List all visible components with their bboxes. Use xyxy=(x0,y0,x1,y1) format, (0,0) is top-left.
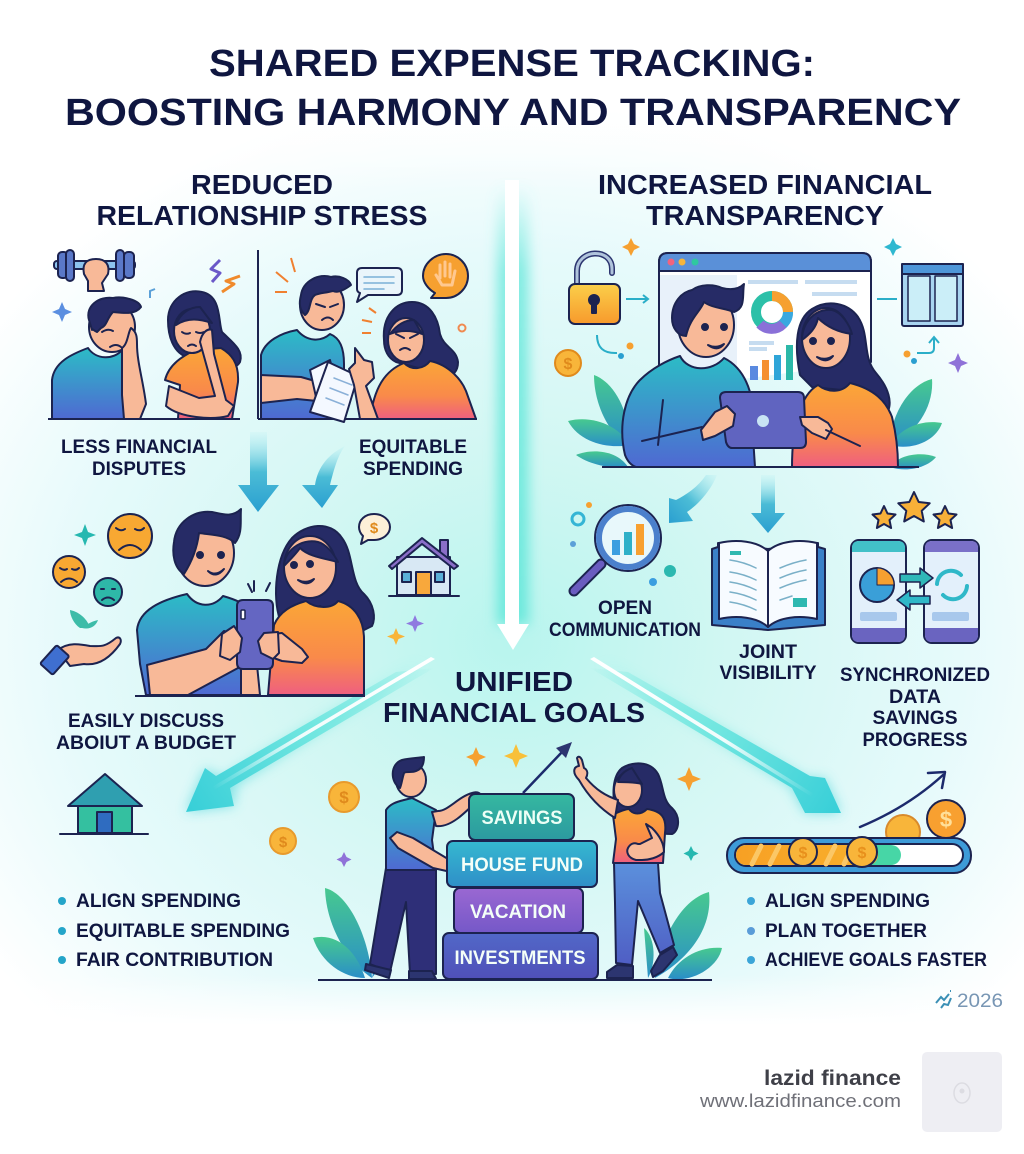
icon: coin xyxy=(555,350,581,376)
label: synchronized data savings progress: DATA xyxy=(889,687,941,708)
icon: stop hand bubble xyxy=(423,254,468,298)
icon: progress bar with coins: $ xyxy=(858,845,867,862)
icon: coin bubble xyxy=(359,514,390,544)
person: woman with phone xyxy=(260,526,374,695)
title: SHARED EXPENSE TRACKING: xyxy=(209,43,815,85)
arrow: to joint visibility xyxy=(751,475,785,533)
icon: sad face large xyxy=(108,514,152,558)
footer brand: www.lazidfinance.com xyxy=(699,1091,901,1111)
title xyxy=(65,43,961,134)
icon: progress bar with coins: $ xyxy=(799,845,808,862)
icon: music note xyxy=(150,289,155,298)
person: woman with tablet xyxy=(792,303,898,467)
stacked blocks xyxy=(443,794,598,979)
icon: coin bubble: $ xyxy=(370,520,379,537)
icon: green house xyxy=(60,774,148,834)
title: BOOSTING HARMONY AND TRANSPARENCY xyxy=(65,92,961,134)
label: equitable spending xyxy=(359,437,467,480)
label: joint visibility: JOINT xyxy=(739,642,797,663)
icon: speech bubble xyxy=(357,268,402,302)
text lines in dashboard xyxy=(748,282,857,349)
list: left bullets: FAIR CONTRIBUTION xyxy=(76,950,273,971)
panel: increased financial transparency xyxy=(549,169,990,751)
label: equitable spending: SPENDING xyxy=(363,459,463,480)
arrow to left section xyxy=(186,657,435,812)
label: open communication: OPEN xyxy=(598,598,652,619)
icon: padlock xyxy=(569,253,620,324)
icon: leaves xyxy=(313,888,722,979)
person: man stacking xyxy=(365,757,481,979)
dashboard window xyxy=(659,253,871,390)
heading: increased financial transparency: INCREASED FINANCIAL xyxy=(598,169,932,200)
heading: unified financial goals: UNIFIED xyxy=(455,666,573,697)
icon: phone xyxy=(220,581,279,669)
icon: coins: $ xyxy=(339,788,349,807)
footer brand: lazid finance xyxy=(764,1066,901,1090)
icon: progress bar with coins: $ xyxy=(940,807,952,832)
block: savings xyxy=(469,794,574,840)
icon: stars xyxy=(872,492,956,528)
block: house fund: HOUSE FUND xyxy=(461,855,583,876)
icon: tablet xyxy=(701,392,860,448)
person: man with tablet xyxy=(622,284,755,467)
divider lines xyxy=(48,250,477,419)
arrow: to open communication xyxy=(669,475,717,523)
heading: reduced relationship stress: RELATIONSHIP STRESS xyxy=(96,200,428,231)
arrow to right section xyxy=(590,657,841,813)
label: open communication: COMMUNICATION xyxy=(549,620,701,641)
person: stressed woman xyxy=(165,291,241,419)
arrow: curved down xyxy=(302,446,345,508)
heading: reduced relationship stress: REDUCED xyxy=(191,169,333,200)
heading: reduced relationship stress xyxy=(96,169,428,231)
icon: synced phones xyxy=(851,540,979,643)
icon: coins xyxy=(270,782,359,854)
panel: reduced relationship stress xyxy=(40,169,477,971)
label: synchronized data savings progress xyxy=(840,665,990,751)
icon: open book xyxy=(712,541,825,630)
icon: connectors xyxy=(597,295,939,353)
icon: sad face teal xyxy=(94,578,122,606)
footer logo square xyxy=(922,1052,1002,1132)
chart: donut xyxy=(756,296,788,329)
icon: house xyxy=(389,538,459,596)
label: less financial disputes: LESS FINANCIAL xyxy=(61,437,217,458)
block: savings: SAVINGS xyxy=(482,808,562,829)
icon: small ring xyxy=(458,324,466,332)
icon: anger marks xyxy=(275,258,376,333)
icon: sparkle teal xyxy=(74,524,96,546)
year mark xyxy=(936,991,1003,1012)
panel: unified financial goals xyxy=(270,666,987,980)
list: left bullets: EQUITABLE SPENDING xyxy=(76,921,290,942)
icon: sparkles xyxy=(622,238,968,373)
label: joint visibility xyxy=(720,642,817,684)
person: angry man xyxy=(261,276,351,419)
label: synchronized data savings progress: SAVINGS xyxy=(872,708,958,729)
list: right bullets: PLAN TOGETHER xyxy=(765,921,927,942)
icon: papers xyxy=(310,360,358,422)
icon: bubbles xyxy=(570,502,676,586)
icon: window xyxy=(902,264,963,326)
label: synchronized data savings progress: SYNCHRONIZED xyxy=(840,665,990,686)
block: vacation xyxy=(454,888,583,933)
year mark: 2026 xyxy=(957,991,1003,1012)
icon: dumbbell xyxy=(54,250,135,291)
list: right bullets: ALIGN SPENDING xyxy=(765,891,930,912)
icon: sparkles xyxy=(387,615,424,645)
person: man with phone xyxy=(137,509,260,695)
label: less financial disputes xyxy=(61,437,217,480)
icon: leaves xyxy=(568,375,942,469)
central arrow xyxy=(497,180,529,650)
label: equitable spending: EQUITABLE xyxy=(359,437,467,458)
arrow: down left xyxy=(238,432,279,512)
block: investments: INVESTMENTS xyxy=(454,948,586,969)
arrow: growth xyxy=(523,742,572,793)
heading: unified financial goals xyxy=(383,666,645,728)
person: stressed man xyxy=(52,297,146,419)
icon: progress bar with coins xyxy=(727,772,971,873)
icon: hand with leaf xyxy=(40,610,121,675)
chart: bars xyxy=(750,345,793,380)
icon: magnifier xyxy=(574,505,661,591)
heading: unified financial goals: FINANCIAL GOALS xyxy=(383,697,645,728)
person: angry woman xyxy=(349,302,476,419)
heading: increased financial transparency xyxy=(598,169,932,231)
block: vacation: VACATION xyxy=(470,902,566,923)
icon: connector dots xyxy=(618,342,917,364)
label: synchronized data savings progress: PROGRESS xyxy=(862,730,968,751)
block: house fund xyxy=(447,841,597,887)
icon: coins: $ xyxy=(279,834,288,851)
person: woman pointing xyxy=(574,757,678,978)
icon: coin: $ xyxy=(564,356,573,373)
label: open communication xyxy=(549,598,701,641)
icon: sad face orange xyxy=(53,556,85,588)
icon: lightning xyxy=(211,260,240,292)
list: left bullets xyxy=(58,891,290,971)
label: less financial disputes: DISPUTES xyxy=(92,459,186,480)
icon: sparkle xyxy=(52,302,72,322)
list: right bullets xyxy=(747,891,987,971)
heading: increased financial transparency: TRANSPARENCY xyxy=(646,200,884,231)
icon: sparkles xyxy=(336,744,701,867)
footer brand xyxy=(699,1066,901,1111)
list: right bullets: ACHIEVE GOALS FASTER xyxy=(765,950,987,971)
label: easily discuss about a budget: ABOIUT A BUDGET xyxy=(56,733,236,754)
label: easily discuss about a budget xyxy=(56,711,236,754)
list: left bullets: ALIGN SPENDING xyxy=(76,891,241,912)
label: easily discuss about a budget: EASILY DISCUSS xyxy=(68,711,224,732)
block: investments xyxy=(443,933,598,979)
label: joint visibility: VISIBILITY xyxy=(720,663,817,684)
